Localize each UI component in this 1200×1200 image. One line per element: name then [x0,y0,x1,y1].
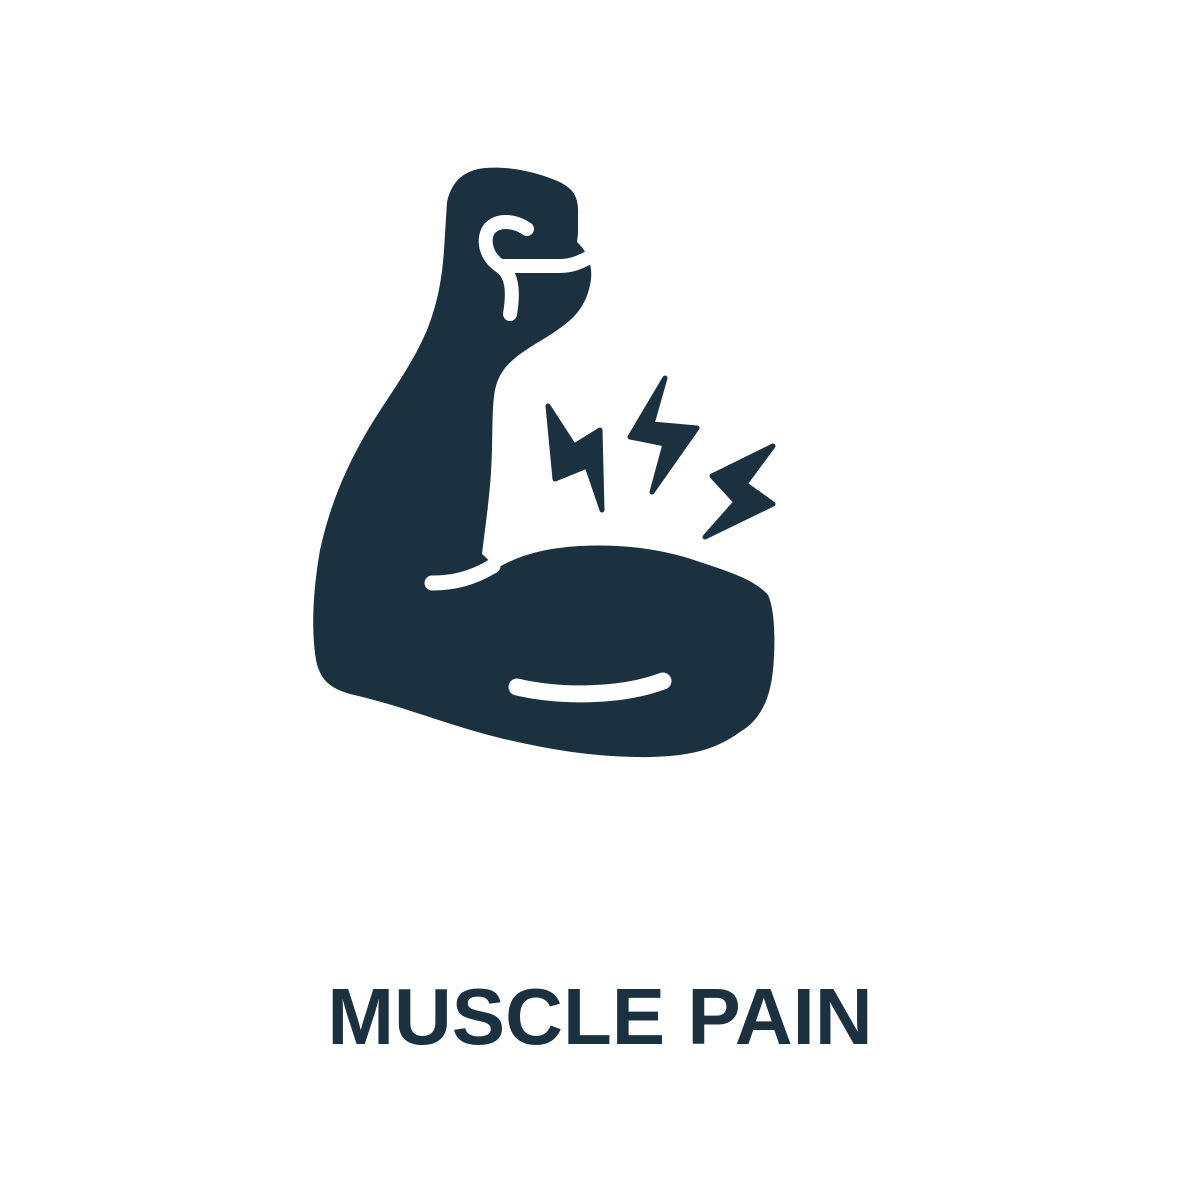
finger curl [486,222,527,314]
icon: flexed arm [313,168,774,757]
bolt 2 [630,378,697,492]
knuckle line [500,258,588,266]
icon: lightning bolts [548,378,773,537]
title: MUSCLE PAIN [327,972,873,1061]
bolt 3 [705,446,773,537]
bolt 1 [548,406,602,510]
elbow crease [432,566,493,583]
bicep line [517,681,663,694]
